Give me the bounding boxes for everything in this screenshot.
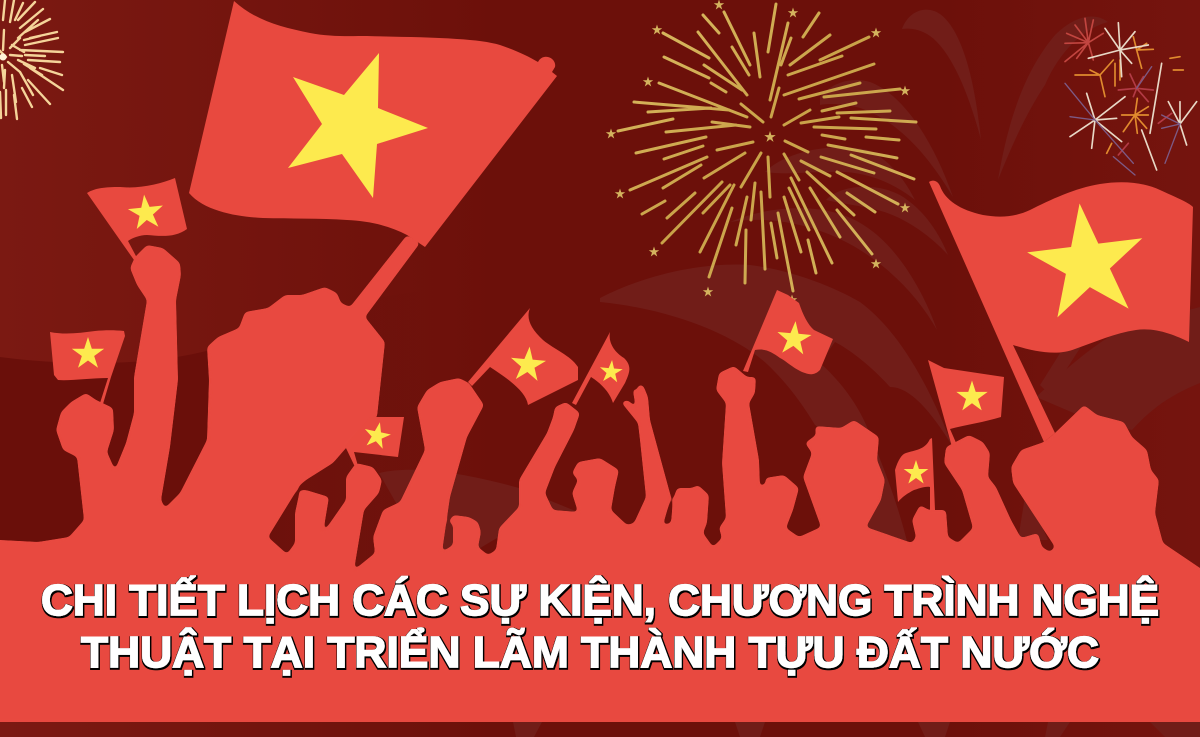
star — [72, 337, 104, 368]
firework: top left — [0, 0, 63, 119]
star — [127, 193, 165, 230]
flag: small pennant — [895, 438, 935, 510]
title — [41, 575, 1159, 677]
star — [904, 460, 928, 484]
flag: centre — [743, 290, 833, 374]
star — [599, 359, 623, 383]
flag: right of centre — [928, 360, 1004, 447]
star — [509, 345, 547, 381]
star — [776, 320, 813, 355]
title: CHI TIẾT LỊCH CÁC SỰ KIỆN, CHƯƠNG TRÌNH NGHỆ — [41, 575, 1159, 625]
firework: multicolour cluster top right — [1065, 18, 1197, 175]
flag: small top-left — [87, 178, 187, 260]
title: THUẬT TẠI TRIỂN LÃM THÀNH TỰU ĐẤT NƯỚC — [81, 626, 1099, 677]
star — [362, 420, 393, 450]
flag: small far left — [50, 330, 125, 404]
crowd silhouette — [0, 235, 1200, 722]
flag: small beside big fist — [345, 417, 404, 467]
star on large left flag — [288, 53, 428, 198]
flag: large right — [929, 181, 1193, 442]
firework: gold central burst — [618, 4, 916, 291]
flag: large left — [189, 1, 557, 247]
star on large right flag — [1022, 196, 1151, 320]
firework: gold stars — [606, 0, 910, 304]
flag: wavy small — [572, 332, 629, 405]
background light swooshes — [379, 10, 1200, 737]
star — [956, 380, 988, 410]
flag: wavy centre-left — [468, 308, 578, 405]
